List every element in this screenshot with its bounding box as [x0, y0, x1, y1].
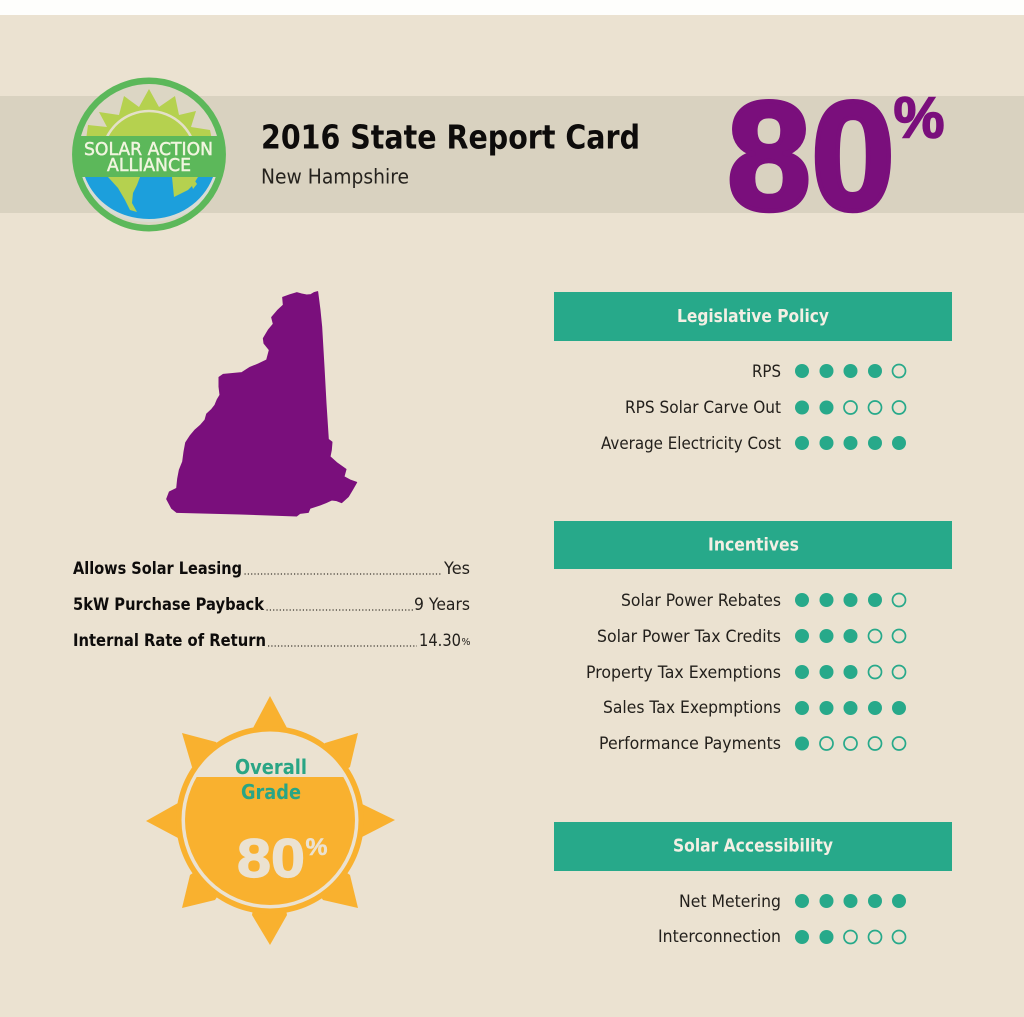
row: Net Metering	[679, 892, 906, 911]
row: Sales Tax Exepmptions	[603, 698, 906, 717]
panel: incentives: Incentives	[708, 536, 799, 556]
row: Average Electricity Cost: Average Electricity Cost	[601, 434, 781, 453]
badge score: 80	[237, 827, 305, 889]
subtitle: New Hampshire	[261, 164, 409, 188]
header band	[0, 96, 1024, 213]
row: Interconnection	[658, 927, 906, 946]
panel: legislative policy: Legislative Policy	[677, 307, 830, 327]
title: 2016 State Report Card	[261, 118, 640, 156]
icon: Solar Action Alliance logo	[70, 80, 228, 228]
solar leasing stat	[73, 559, 470, 578]
payback stat: 9 Years	[414, 595, 470, 614]
panel: legislative policy	[554, 292, 952, 453]
row: Performance Payments: Performance Payments	[599, 734, 781, 753]
badge: overall grade sun: %	[306, 834, 328, 861]
panel: incentives	[554, 521, 952, 753]
row: Sales Tax Exepmptions: Sales Tax Exepmptions	[603, 698, 781, 717]
map: New Hampshire	[167, 292, 357, 516]
logo text: SOLAR ACTION	[84, 139, 213, 160]
section header	[554, 521, 952, 569]
row: Average Electricity Cost	[601, 434, 906, 453]
row: Performance Payments	[599, 734, 906, 753]
rate of return stat: Internal Rate of Return	[73, 631, 266, 650]
section header	[554, 292, 952, 341]
row: RPS	[752, 362, 906, 381]
row: Net Metering: Net Metering	[679, 892, 781, 911]
row: Interconnection: Interconnection	[658, 927, 781, 946]
row: Solar Power Tax Credits	[597, 627, 906, 646]
rate of return stat: 14.30	[419, 631, 461, 650]
badge: overall grade sun	[146, 696, 395, 945]
payback stat	[73, 595, 470, 614]
payback stat: 5kW Purchase Payback	[73, 595, 265, 614]
headline score: %	[894, 86, 944, 150]
headline score: 80	[727, 70, 895, 242]
row: Property Tax Exemptions	[586, 663, 906, 682]
rate of return stat	[73, 631, 470, 650]
solar leasing stat: Yes	[443, 559, 470, 578]
row: Solar Power Rebates: Solar Power Rebates	[621, 591, 781, 610]
row: RPS Solar Carve Out: RPS Solar Carve Out	[625, 398, 781, 417]
badge: overall grade sun: Grade	[241, 780, 301, 804]
solar leasing stat: Allows Solar Leasing	[73, 559, 242, 578]
rate of return stat: %	[462, 637, 470, 648]
row: Property Tax Exemptions: Property Tax Exemptions	[586, 663, 781, 682]
row: Solar Power Rebates	[621, 591, 906, 610]
icon: Solar Action Alliance logo: ALLIANCE	[107, 155, 191, 176]
section header	[554, 822, 952, 871]
row: Solar Power Tax Credits: Solar Power Tax Credits	[597, 627, 781, 646]
panel: solar accessibility: Solar Accessibility	[673, 836, 834, 856]
row: RPS Solar Carve Out	[625, 398, 906, 417]
badge label: Overall	[235, 755, 307, 779]
panel: solar accessibility	[554, 822, 952, 946]
row: RPS: RPS	[752, 362, 781, 381]
